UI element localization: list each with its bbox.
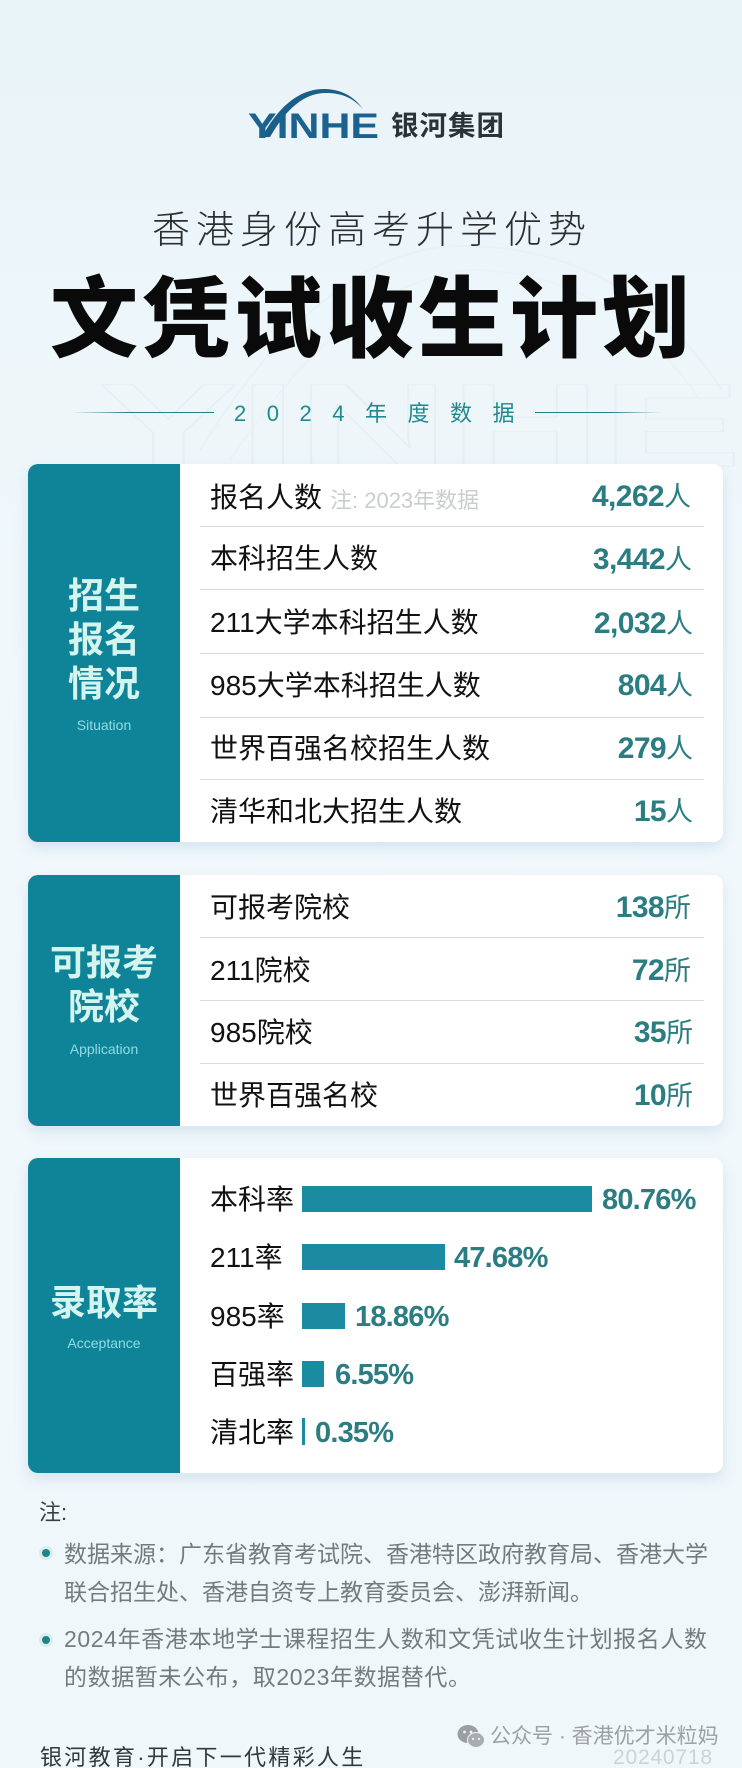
row label: 985大学本科招生人数 bbox=[210, 670, 481, 701]
row value: 72所 bbox=[632, 954, 691, 987]
row value: 3,442人 bbox=[593, 543, 692, 576]
bar: 80.76% bbox=[302, 1186, 592, 1212]
bar: 47.68% bbox=[302, 1244, 445, 1270]
icon: wechat bbox=[458, 1725, 484, 1747]
bar value: 6.55% bbox=[335, 1359, 413, 1391]
logo Chinese name: 银河集团 bbox=[391, 110, 505, 141]
row value: 138所 bbox=[616, 891, 691, 924]
heading English: Situation bbox=[77, 717, 131, 733]
row value: 35所 bbox=[634, 1016, 693, 1049]
panel side: application heading bbox=[28, 875, 180, 1126]
row label: 清华和北大招生人数 bbox=[210, 796, 462, 827]
heading English: Acceptance bbox=[67, 1335, 141, 1351]
bar: 0.35% bbox=[302, 1418, 305, 1445]
heading text: 情况 bbox=[68, 663, 140, 704]
logo bbox=[248, 89, 505, 146]
row value: 279人 bbox=[618, 732, 693, 765]
row value: 2,032人 bbox=[594, 607, 693, 640]
bar value: 0.35% bbox=[315, 1417, 393, 1449]
year divider right line bbox=[535, 412, 662, 413]
note two bbox=[64, 1626, 708, 1690]
notes heading: 注: bbox=[39, 1500, 67, 1525]
row value: 804人 bbox=[618, 669, 693, 702]
row value: 15人 bbox=[634, 795, 693, 828]
heading text bbox=[68, 575, 140, 704]
note two: 的数据暂未公布，取2023年数据替代。 bbox=[64, 1664, 472, 1690]
row label: 世界百强名校招生人数 bbox=[210, 733, 490, 764]
panel side: situation heading bbox=[28, 464, 180, 842]
bar: 18.86% bbox=[302, 1303, 345, 1329]
row label: 985院校 bbox=[210, 1017, 313, 1048]
note bullet bbox=[42, 1636, 50, 1644]
background watermark bbox=[98, 360, 742, 480]
row label: 本科招生人数 bbox=[210, 543, 378, 574]
row label: 211大学本科招生人数 bbox=[210, 607, 479, 638]
title: 文凭试收生计划 bbox=[50, 270, 694, 369]
row value: 10所 bbox=[634, 1079, 693, 1112]
row value: 4,262人 bbox=[592, 480, 691, 513]
heading text bbox=[50, 942, 158, 1027]
row label: 世界百强名校 bbox=[210, 1080, 378, 1111]
heading text: 院校 bbox=[68, 986, 140, 1027]
year divider left line bbox=[71, 412, 214, 413]
heading text: 录取率 bbox=[50, 1282, 158, 1323]
panel: acceptance bbox=[28, 1158, 723, 1473]
row label: 211院校 bbox=[210, 955, 311, 986]
row note: 注: 2023年数据 bbox=[330, 488, 479, 513]
panel: situation bbox=[28, 464, 723, 842]
bar label: 本科率 bbox=[210, 1184, 294, 1215]
year label: 2024年度数据 bbox=[234, 401, 535, 426]
panel: application bbox=[28, 875, 723, 1126]
subtitle: 香港身份高考升学优势 bbox=[152, 210, 592, 252]
heading text: 招生 bbox=[68, 575, 140, 616]
bar value: 18.86% bbox=[355, 1301, 449, 1333]
heading text: 报名 bbox=[68, 619, 140, 660]
logo wordmark: YINHE bbox=[248, 107, 379, 146]
bar: 6.55% bbox=[302, 1361, 324, 1387]
heading text: 可报考 bbox=[50, 942, 158, 983]
logo arc bbox=[262, 89, 363, 137]
bar label: 985率 bbox=[210, 1301, 285, 1332]
note one: 数据来源：广东省教育考试院、香港特区政府教育局、香港大学 bbox=[64, 1541, 708, 1567]
note one: 联合招生处、香港自资专上教育委员会、澎湃新闻。 bbox=[64, 1579, 593, 1605]
note two: 2024年香港本地学士课程招生人数和文凭试收生计划报名人数 bbox=[64, 1626, 708, 1652]
note one bbox=[64, 1541, 708, 1605]
watermark account name: 公众号 · 香港优才米粒妈 bbox=[490, 1725, 719, 1748]
row label: 可报考院校 bbox=[210, 892, 350, 923]
bar label: 211率 bbox=[210, 1242, 283, 1273]
panel side: acceptance heading bbox=[28, 1158, 180, 1473]
heading English: Application bbox=[70, 1041, 138, 1057]
row label: 报名人数 bbox=[210, 482, 322, 513]
bar label: 百强率 bbox=[210, 1359, 294, 1390]
bar value: 47.68% bbox=[454, 1242, 548, 1274]
bar label: 清北率 bbox=[210, 1417, 294, 1448]
bar value: 80.76% bbox=[602, 1184, 696, 1216]
note bullet bbox=[42, 1549, 50, 1557]
